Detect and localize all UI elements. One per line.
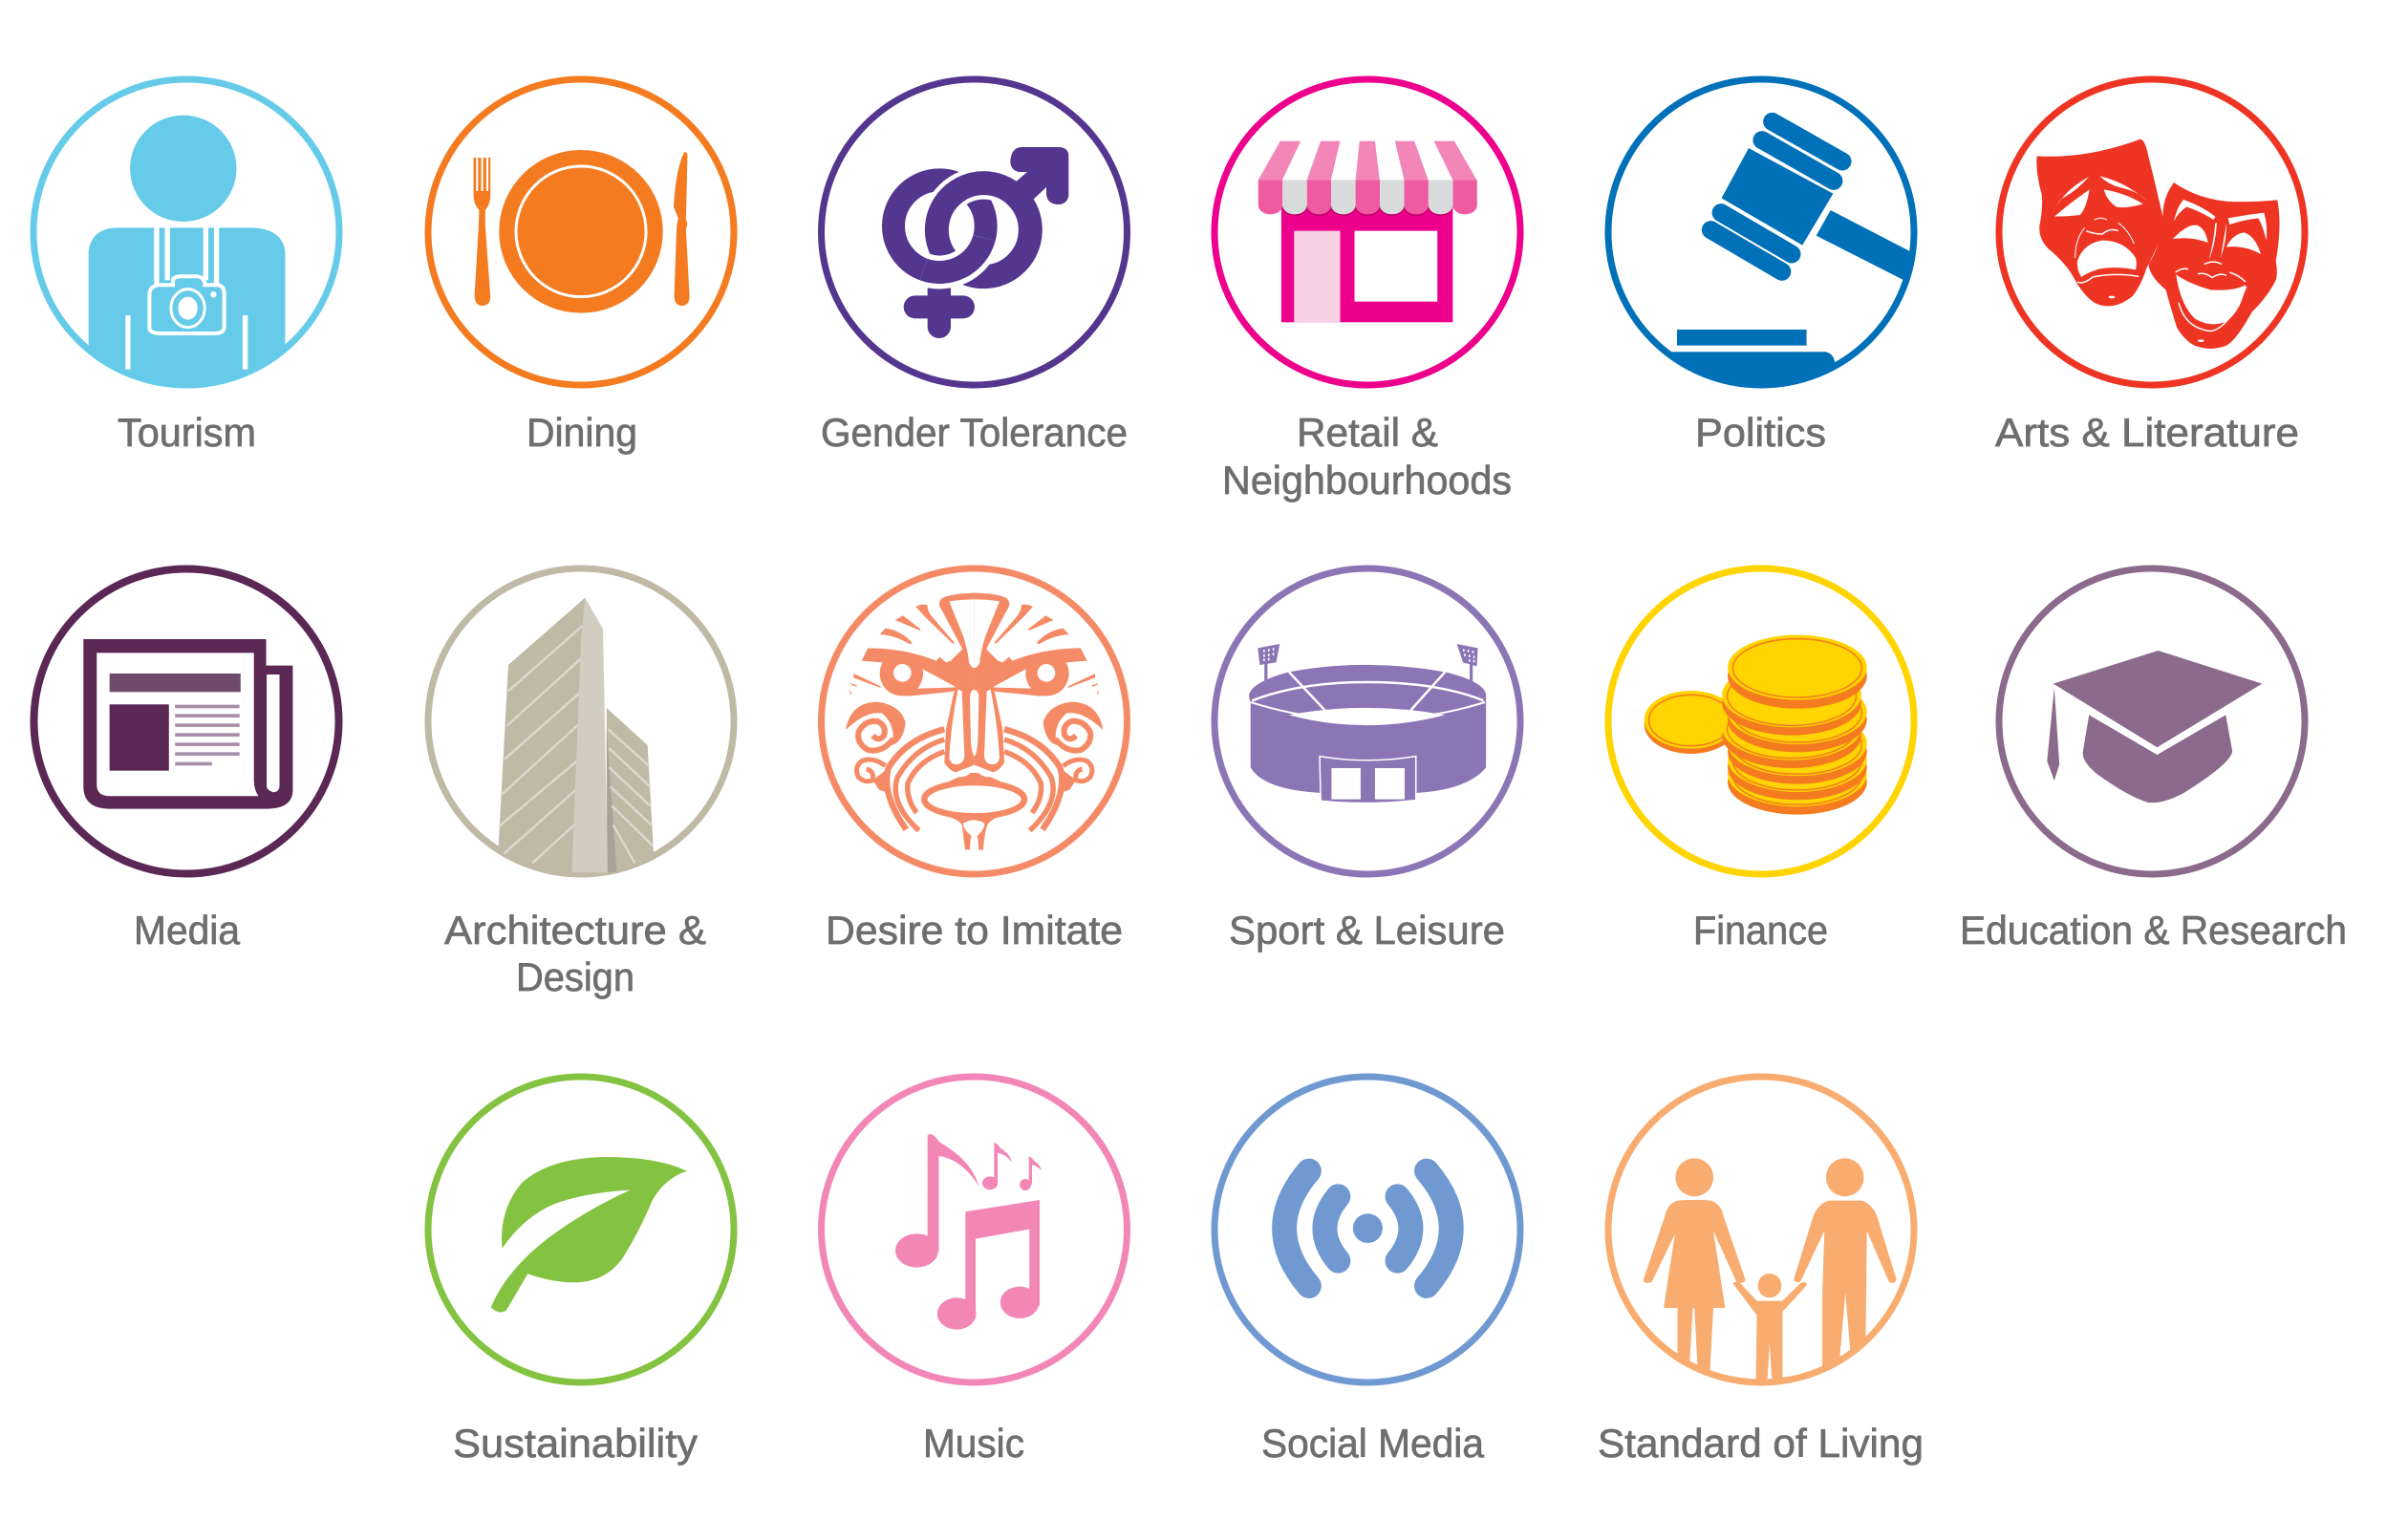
label: Gender Tolerance <box>821 410 1128 455</box>
ring <box>33 79 339 385</box>
label <box>444 908 706 999</box>
ring <box>428 79 734 385</box>
panel: Dining <box>428 79 734 455</box>
icon: interlocked gender symbols <box>893 147 1068 338</box>
icon: plate, fork and knife <box>474 150 690 313</box>
ring <box>1215 1077 1520 1382</box>
label: Desire to Imitate <box>826 908 1123 953</box>
ring <box>822 1077 1128 1382</box>
panel: Retail & Neighbourhoods <box>1215 79 1520 503</box>
icon: family <box>1644 1158 1897 1385</box>
icon: musical notes <box>895 1134 1042 1330</box>
label: Standard of Living <box>1598 1421 1924 1466</box>
icon: theatre masks <box>2036 139 2279 349</box>
icon: gavel <box>1671 113 1909 382</box>
panel: Sport & Leisure <box>1215 568 1520 953</box>
icon: stadium <box>1249 644 1486 803</box>
icon: broadcast signal <box>1284 1171 1451 1286</box>
ring <box>428 568 734 874</box>
icon: gold coins <box>1645 635 1867 815</box>
panel: Education & Research <box>1960 568 2347 953</box>
icon: tourist with camera <box>89 116 285 392</box>
label: Politics <box>1695 410 1826 455</box>
label: Sustainability <box>453 1421 698 1466</box>
ring <box>1999 79 2305 385</box>
label: Design <box>516 954 634 999</box>
ring <box>822 568 1128 874</box>
panel: Music <box>822 1077 1128 1466</box>
ring <box>1608 79 1914 385</box>
label: Retail & <box>1297 410 1438 455</box>
panel: Standard of Living <box>1598 1077 1924 1466</box>
icon: leaf <box>491 1157 687 1313</box>
panel: Desire to Imitate <box>822 568 1128 953</box>
panel: Architecture & Design <box>428 568 734 999</box>
icon: graduation cap <box>2047 651 2262 803</box>
label: Sport & Leisure <box>1229 908 1505 953</box>
ring <box>1608 568 1914 874</box>
icon: Maori face <box>846 593 1103 849</box>
label: Arts & Literature <box>1995 410 2299 455</box>
label: Media <box>134 908 241 953</box>
panel: Gender Tolerance <box>821 79 1128 455</box>
ring <box>428 1077 734 1382</box>
ring <box>34 569 338 873</box>
panel: Arts & Literature <box>1995 79 2305 455</box>
label: Tourism <box>118 410 256 455</box>
panel: Social Media <box>1215 1077 1520 1466</box>
icon: shop with awning <box>1258 141 1477 322</box>
ring <box>1215 79 1520 385</box>
ring <box>1608 1077 1914 1382</box>
panel: Tourism <box>33 79 339 455</box>
ring <box>1999 568 2305 874</box>
icon: newspaper <box>83 639 292 809</box>
label: Finance <box>1693 908 1828 953</box>
icon: skyscraper <box>497 598 656 882</box>
label: Social Media <box>1261 1421 1485 1466</box>
label: Education & Research <box>1960 908 2347 953</box>
label: Dining <box>527 410 637 455</box>
label: Music <box>923 1421 1024 1466</box>
label: Architecture & <box>444 908 706 953</box>
panel: Politics <box>1608 79 1923 455</box>
ring <box>822 79 1128 385</box>
panel: Sustainability <box>428 1077 734 1466</box>
label <box>1222 410 1512 503</box>
ring <box>1215 568 1520 874</box>
panel: Media <box>34 569 338 953</box>
panel: Finance <box>1608 568 1914 953</box>
label: Neighbourhoods <box>1222 458 1512 503</box>
